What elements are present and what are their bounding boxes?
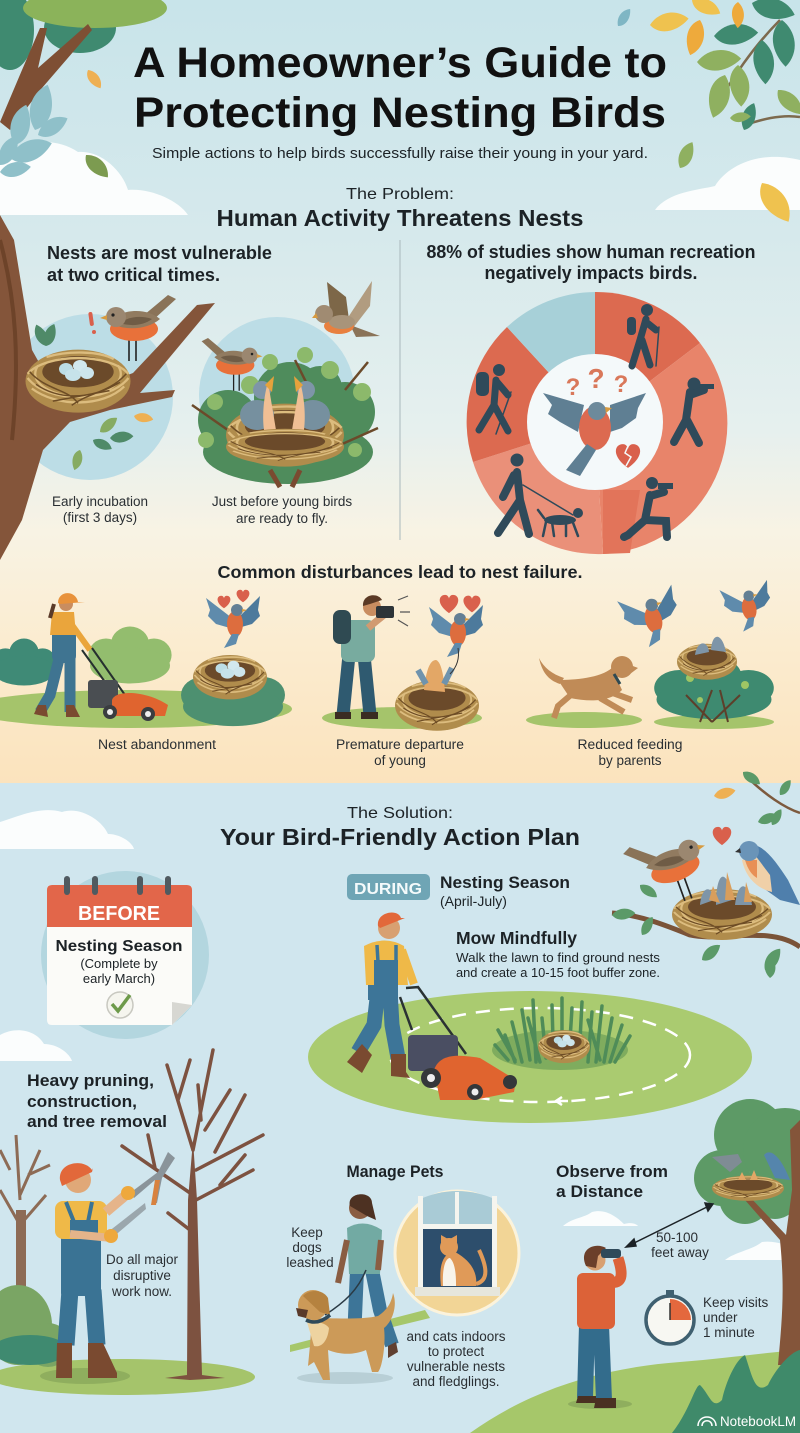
person mowing — [347, 912, 414, 1078]
caption: premature departure: Premature departure — [336, 737, 464, 752]
heading: observe: Observe from — [556, 1162, 668, 1181]
text: major work: work now. — [111, 1284, 172, 1299]
text: keep dogs leashed: Keep — [291, 1225, 323, 1240]
text: visit duration — [703, 1295, 769, 1340]
text: distance: 50-100 — [656, 1230, 698, 1245]
heading: nesting season — [440, 873, 570, 909]
person mowing — [34, 593, 90, 717]
caption: reduced feeding: Reduced feeding — [578, 737, 682, 752]
icon: distressed bird — [543, 393, 646, 476]
icon: dog walker — [498, 454, 583, 536]
icon: kneeling photographer — [624, 478, 673, 537]
panel: common disturbances — [0, 580, 775, 768]
main bare tree — [165, 1140, 225, 1380]
caption: early incubation: (first 3 days) — [63, 510, 137, 525]
background: top section — [0, 0, 800, 783]
running dog — [539, 656, 638, 718]
illustration: early incubation nest on branch — [0, 215, 215, 560]
lawn mower — [82, 648, 168, 721]
heading: 88 percent: negatively impacts birds. — [484, 263, 698, 283]
text: keep dogs leashed — [286, 1225, 334, 1270]
title — [133, 39, 667, 137]
person with binoculars — [568, 1246, 632, 1409]
person with saw and pruners — [55, 1152, 175, 1378]
heading: vulnerable times — [47, 243, 272, 285]
small bare tree — [0, 1135, 50, 1298]
clouds — [0, 142, 800, 1260]
heading: nesting season: Nesting Season — [440, 873, 570, 892]
heading: the solution: The Solution: — [347, 805, 453, 822]
panel: 88 percent — [426, 242, 756, 554]
caption: before fledging — [212, 494, 352, 526]
donut chart — [467, 292, 727, 554]
illustration: nest on branch with birds — [612, 823, 800, 978]
illustration: lawn, buffer zone, mower — [308, 912, 752, 1123]
dog — [296, 1290, 395, 1384]
heading: manage pets: Manage Pets — [346, 1163, 444, 1181]
badge: during — [347, 874, 430, 900]
tree with nest — [694, 1099, 800, 1365]
heading and text: mow mindfully: Mow Mindfully — [456, 928, 577, 948]
illustration: pruning scene — [0, 1050, 263, 1395]
heading: observe: a Distance — [556, 1182, 643, 1201]
title: A Homeowner’s Guide to — [133, 39, 667, 87]
caption: before fledging: are ready to fly. — [236, 511, 328, 526]
text: keep dogs leashed: dogs — [292, 1240, 322, 1255]
text: major work: disruptive — [113, 1268, 171, 1283]
text: visit duration: under — [703, 1310, 738, 1325]
scene: nest abandonment — [0, 590, 292, 728]
icon: question marks: ? — [566, 374, 580, 401]
icon: hiker right — [627, 304, 659, 366]
heading: the solution: Your Bird-Friendly Action Plan — [220, 824, 580, 850]
heading: heavy pruning: construction, — [27, 1092, 137, 1111]
caption: early incubation — [52, 494, 148, 525]
logo: NotebookLM: NotebookLM — [720, 1413, 796, 1429]
text: cats indoors: vulnerable nests — [407, 1359, 505, 1374]
heading: heavy pruning: Heavy pruning, — [27, 1071, 154, 1090]
text: cats indoors: and cats indoors — [406, 1329, 506, 1344]
heading: vulnerable times: Nests are most vulnerable — [47, 243, 272, 263]
heading: 88 percent — [426, 242, 756, 283]
caption: reduced feeding — [578, 737, 682, 768]
panel: manage pets — [286, 1163, 519, 1389]
heading: heavy pruning: and tree removal — [27, 1112, 167, 1131]
text: keep dogs leashed: leashed — [286, 1255, 334, 1270]
divider — [400, 240, 401, 540]
calendar card — [41, 871, 209, 1039]
calendar card: BEFORE — [78, 903, 160, 925]
window with cat — [395, 1191, 519, 1315]
text: distance: feet away — [651, 1245, 709, 1260]
icon: photographer with telephoto — [674, 378, 714, 443]
panel: observe from a distance — [470, 1099, 800, 1433]
foreground bushes — [672, 1350, 800, 1433]
heading: the problem: Human Activity Threatens Nests — [216, 205, 584, 231]
icon: hiker left — [476, 364, 511, 434]
text: distance — [651, 1230, 709, 1260]
subtitle: Simple actions to help birds successfully raise their young in your yard. — [152, 145, 648, 162]
badge: during: DURING — [354, 881, 422, 898]
cat — [440, 1235, 485, 1286]
arrow: distance — [626, 1203, 713, 1247]
decoration: top right branches and leaves — [614, 0, 800, 228]
text: major work: Do all major — [106, 1252, 179, 1267]
caption: nest abandonment: Nest abandonment — [98, 737, 216, 752]
flying brown bird — [312, 281, 380, 337]
icon: question marks: ? — [614, 371, 628, 398]
heading: 88 percent: 88% of studies show human recreation — [426, 242, 756, 262]
caption: premature departure — [336, 737, 464, 768]
heading: heavy pruning — [27, 1071, 167, 1131]
text: cats indoors: and fledglings. — [412, 1374, 500, 1389]
person walking dog — [325, 1194, 398, 1358]
icon: question marks: ? — [587, 363, 605, 394]
text: major work — [106, 1252, 179, 1299]
icon: broken heart — [616, 444, 640, 468]
icon: check mark — [107, 992, 133, 1018]
caption: early incubation: Early incubation — [52, 494, 148, 509]
icon: question marks — [566, 363, 628, 401]
heading: observe — [556, 1162, 668, 1201]
heading: the solution — [220, 805, 580, 850]
text: visit duration: 1 minute — [703, 1325, 755, 1340]
stopwatch icon — [646, 1290, 694, 1344]
scene: premature departure — [322, 595, 483, 731]
caption: reduced feeding: by parents — [598, 753, 662, 768]
decoration: top left tree and leaves — [0, 0, 167, 183]
panel: vulnerable times — [0, 215, 380, 560]
caption: before fledging: Just before young birds — [212, 494, 352, 509]
lawn mower — [400, 987, 517, 1100]
heading and text: mow mindfully: Walk the lawn to find ground nests — [456, 951, 660, 965]
calendar card: Nesting Season — [56, 938, 182, 955]
panel: before nesting season — [0, 871, 263, 1395]
illustration: nest with chicks in bush — [192, 281, 380, 487]
caption: premature departure: of young — [374, 753, 426, 768]
decoration: right branch leaves near heading — [713, 768, 800, 827]
heading and text: mow mindfully — [456, 928, 660, 980]
heading and text: mow mindfully: and create a 10-15 foot buffer zone. — [456, 966, 660, 980]
title: Protecting Nesting Birds — [134, 89, 666, 137]
heading: the problem: The Problem: — [346, 186, 454, 203]
scene: reduced feeding — [526, 580, 775, 729]
text: visit duration: Keep visits — [703, 1295, 769, 1310]
background: lower section — [0, 783, 800, 1433]
heading: nesting season: (April-July) — [440, 893, 507, 909]
heading: the problem — [216, 186, 584, 231]
text: cats indoors — [406, 1329, 506, 1389]
grass strip — [290, 1310, 430, 1352]
calendar card: (Complete by — [80, 956, 158, 971]
panel: during nesting season — [308, 823, 800, 1123]
heading: vulnerable times: at two critical times. — [47, 265, 220, 285]
lawn hill — [470, 1350, 800, 1433]
text: cats indoors: to protect — [428, 1344, 484, 1359]
calendar card: early March) — [83, 971, 155, 986]
heading: common disturbances: Common disturbances lead to nest failure. — [218, 562, 582, 582]
